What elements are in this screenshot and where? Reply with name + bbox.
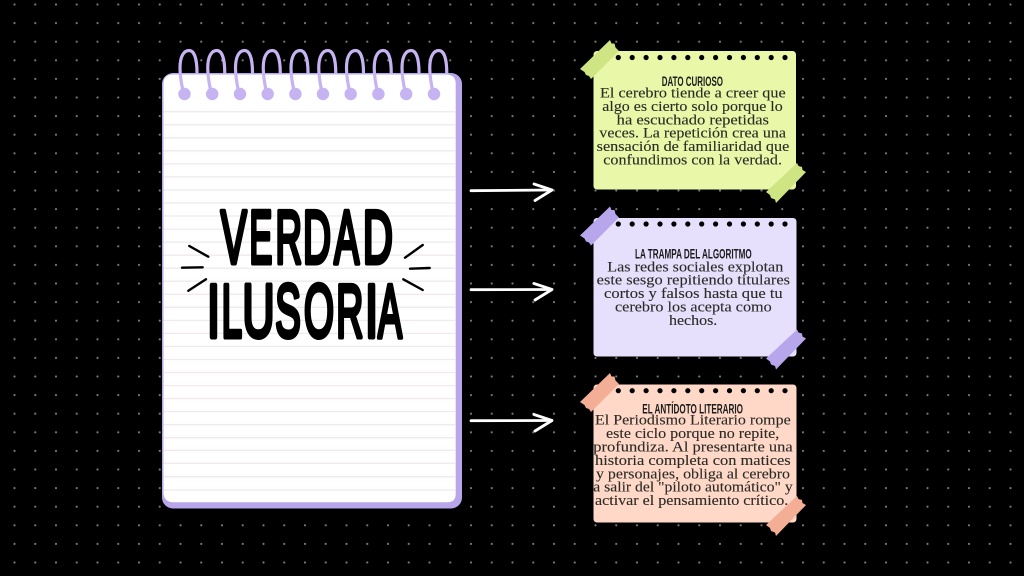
title: E <box>249 195 272 279</box>
notebook page <box>164 74 456 502</box>
notebook back cover <box>162 73 462 508</box>
title: U <box>243 269 275 353</box>
title: R <box>276 195 302 279</box>
title: S <box>275 269 301 353</box>
panel: la trampa del algoritmo: este sesgo repitiendo titulares <box>597 273 790 289</box>
panel: la trampa del algoritmo: Las redes sociales explotan <box>607 259 784 275</box>
icon: emphasis marks left <box>182 246 208 291</box>
title: I <box>207 269 220 353</box>
title: L <box>222 269 242 353</box>
panel: spiral notebook <box>162 50 462 508</box>
panel: el antídoto literario: historia completa con matices <box>595 453 791 469</box>
title: V <box>221 195 247 279</box>
panel: la trampa del algoritmo <box>580 206 806 370</box>
panel: el antídoto literario: activar el pensamiento crítico. <box>595 493 788 509</box>
title: A <box>334 195 359 279</box>
panel: dato curioso: veces. La repetición crea una <box>599 126 786 142</box>
arrow: notebook to purple note <box>471 284 552 300</box>
panel: dato curioso: algo es cierto solo porque lo <box>602 99 783 115</box>
spiral rings <box>178 50 447 100</box>
panel: dato curioso: DATO CURIOSO <box>662 74 723 89</box>
panel: dato curioso: confundimos con la verdad. <box>603 152 782 168</box>
panel: dato curioso: ha escuchado repetidas <box>617 112 769 128</box>
panel: el antídoto literario <box>580 373 806 536</box>
panel: el antídoto literario: profundiza. Al presentarte una <box>593 440 793 456</box>
title: O <box>304 269 334 353</box>
panel: dato curioso: El cerebro tiende a creer que <box>600 86 786 102</box>
panel: dato curioso: sensación de familiaridad que <box>597 139 790 155</box>
text: A <box>378 269 402 353</box>
panel: la trampa del algoritmo: hechos. <box>669 313 717 329</box>
title: D <box>303 195 331 279</box>
panel: el antídoto literario: El Periodismo Literario rompe <box>595 413 791 429</box>
panel: el antídoto literario: a salir del "piloto automático" y <box>593 480 793 496</box>
panel: el antídoto literario: y personajes, obliga al cerebro <box>596 466 790 482</box>
arrow: notebook to green note <box>471 184 552 200</box>
arrow: notebook to peach note <box>471 414 552 431</box>
panel: la trampa del algoritmo: LA TRAMPA DEL ALGORITMO <box>635 247 752 262</box>
title: I <box>365 269 378 353</box>
title <box>207 195 402 353</box>
panel: la trampa del algoritmo: cortos y falsos hasta que tu <box>604 286 783 302</box>
title: R <box>336 269 363 353</box>
title: D <box>363 195 393 279</box>
icon: emphasis marks right <box>403 245 430 290</box>
panel: el antídoto literario: este ciclo porque no repite, <box>606 426 779 442</box>
panel: el antídoto literario: EL ANTÍDOTO LITERARIO <box>642 401 743 416</box>
panel: dato curioso <box>580 40 806 203</box>
panel: la trampa del algoritmo: cerebro los acepta como <box>615 300 772 316</box>
